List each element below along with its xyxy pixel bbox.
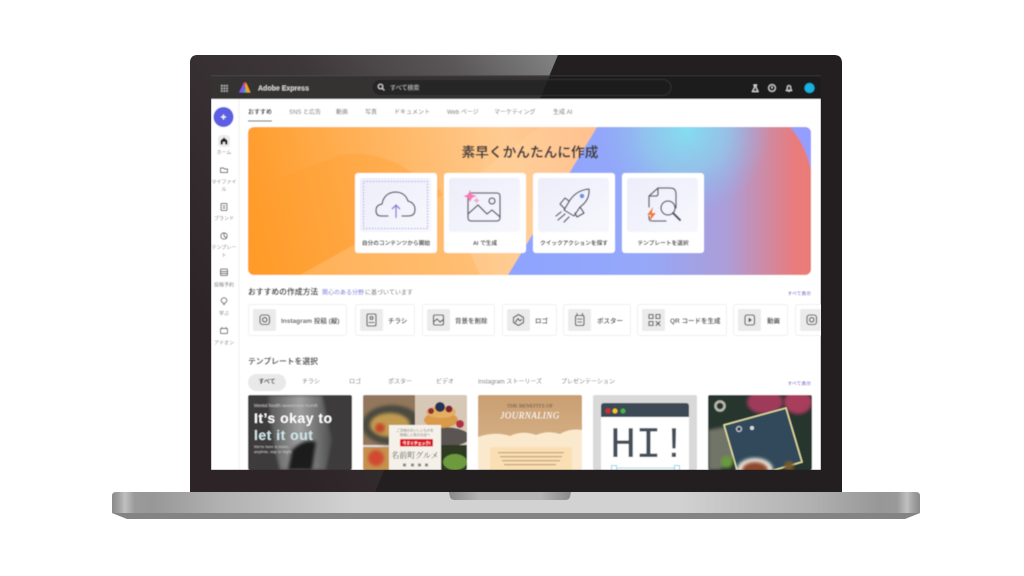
template: food flyer [362, 395, 470, 470]
tabs: ドキュメント [394, 110, 430, 116]
chip: logo: ロゴ [535, 316, 548, 325]
card: upload: 自分のコンテンツから開始 [362, 239, 430, 247]
search box [372, 80, 671, 96]
tabs: SNS と広告 [289, 108, 321, 116]
chip: flyer [356, 304, 414, 336]
hero title: 素早くかんたんに作成 [462, 144, 599, 160]
laptop lid [190, 55, 842, 492]
chip: poster: ポスター [597, 316, 623, 325]
card: upload [355, 173, 437, 253]
template: HI! [593, 395, 697, 473]
filter tabs: ロゴ [349, 378, 361, 386]
laptop base [112, 492, 920, 519]
nav: add-ons: アドオン [214, 340, 234, 346]
filter tabs: ポスター [388, 378, 412, 386]
card: AI generate [444, 173, 526, 253]
nav: schedule [214, 269, 234, 288]
chip: poster [564, 304, 630, 336]
nav: home [217, 135, 231, 156]
hero banner [248, 127, 811, 275]
icon: avatar [804, 83, 814, 93]
nav: my files: ル [221, 187, 227, 193]
template: mental health: let it out [254, 427, 313, 443]
chip: remove background: 背景を削除 [455, 316, 488, 325]
filter tabs: ビデオ [436, 378, 454, 386]
brand name: Adobe Express [258, 86, 309, 92]
section heading: recommended: おすすめの作成方法 [248, 286, 318, 296]
icon: app grid [221, 85, 228, 92]
template: mental health: It’s okay to [254, 410, 333, 426]
card: AI generate: AI で生成 [473, 239, 497, 247]
nav: templates: ト [221, 253, 227, 259]
icon: beta flask [752, 85, 758, 92]
template: food flyer: 名前町グルメ [391, 450, 439, 460]
nav: add-ons [214, 327, 234, 346]
top bar [211, 75, 821, 99]
filter tabs: すべて [258, 378, 276, 386]
card: choose template [622, 173, 704, 253]
nav: my files [211, 168, 237, 193]
template: food flyer: 今すぐチェック! [403, 440, 430, 446]
search box: すべて検索 [390, 84, 419, 92]
tabs: マーケティング [494, 108, 536, 116]
chip: instagram [248, 304, 346, 336]
filter tabs: プレゼンテーション [561, 378, 615, 386]
chip: QR code: QR コードを生成 [670, 316, 721, 325]
laptop notch [449, 492, 571, 500]
link: show all: すべて表示 [788, 290, 811, 297]
chip: video [734, 304, 788, 336]
chip: instagram: Instagram 投稿 (縦) [281, 316, 340, 325]
tabs: 動画 [336, 108, 348, 116]
template: mental health: We're here to listen, [254, 444, 289, 449]
icon: bell [786, 86, 792, 91]
template: mental health: Mental health awareness month [254, 403, 318, 408]
nav: schedule: 投稿予約 [214, 282, 234, 288]
chip: instagram partial [795, 304, 821, 336]
filter tabs: Instagram ストーリーズ [478, 378, 542, 386]
tabs: Web ページ [447, 109, 479, 116]
nav: my files: マイファイ [211, 180, 237, 186]
template: journaling: THE BENEFITS OF [507, 404, 553, 410]
nav: home: ホーム [217, 150, 231, 156]
chip: flyer: チラシ [388, 317, 408, 325]
nav: brand: ブランド [214, 215, 234, 222]
nav: templates [212, 233, 236, 259]
app screen [211, 75, 856, 482]
template: mental health [248, 395, 352, 470]
card: choose template: テンプレートを選択 [637, 239, 689, 247]
tabs: 写真 [365, 108, 377, 116]
tabs: 生成 AI [553, 108, 573, 116]
chip: logo [502, 304, 556, 336]
nav: learn: 学ぶ [219, 310, 229, 317]
section heading: recommended [248, 286, 413, 296]
template: journaling [478, 395, 582, 470]
card: quick actions [533, 173, 615, 253]
tabs: おすすめ [248, 109, 272, 116]
icon: help [769, 85, 775, 91]
sidebar [211, 99, 239, 470]
card: quick actions: クイックアクションを探す [540, 239, 608, 247]
tabs [248, 108, 573, 122]
nav: brand [214, 204, 234, 222]
nav: templates: テンプレー [212, 245, 236, 251]
filter tabs: チラシ [302, 378, 320, 386]
icon: Adobe Express logo [239, 82, 250, 92]
create button [214, 107, 234, 127]
chip: remove background [422, 304, 494, 336]
template: mental health: anytime, day or night. [254, 449, 292, 454]
nav: learn [219, 298, 229, 317]
chip: video: 動画 [767, 316, 780, 325]
section heading: recommended: 関心のある分野 [322, 288, 364, 296]
template: journaling: JOURNALING [500, 410, 560, 420]
template: food flyer: 地域に人気のお店へ [400, 432, 431, 437]
template: restaurant photo [708, 390, 812, 482]
filter tabs [248, 374, 615, 391]
template: HI!: HI! [610, 421, 686, 471]
chip: QR code [638, 304, 726, 336]
template: food flyer: ご当地のおいしいものを [396, 428, 434, 432]
link: show all templates: すべて表示 [788, 380, 811, 387]
section heading: templates: テンプレートを選択 [248, 356, 318, 366]
section heading: recommended: に基づいています [365, 288, 413, 296]
